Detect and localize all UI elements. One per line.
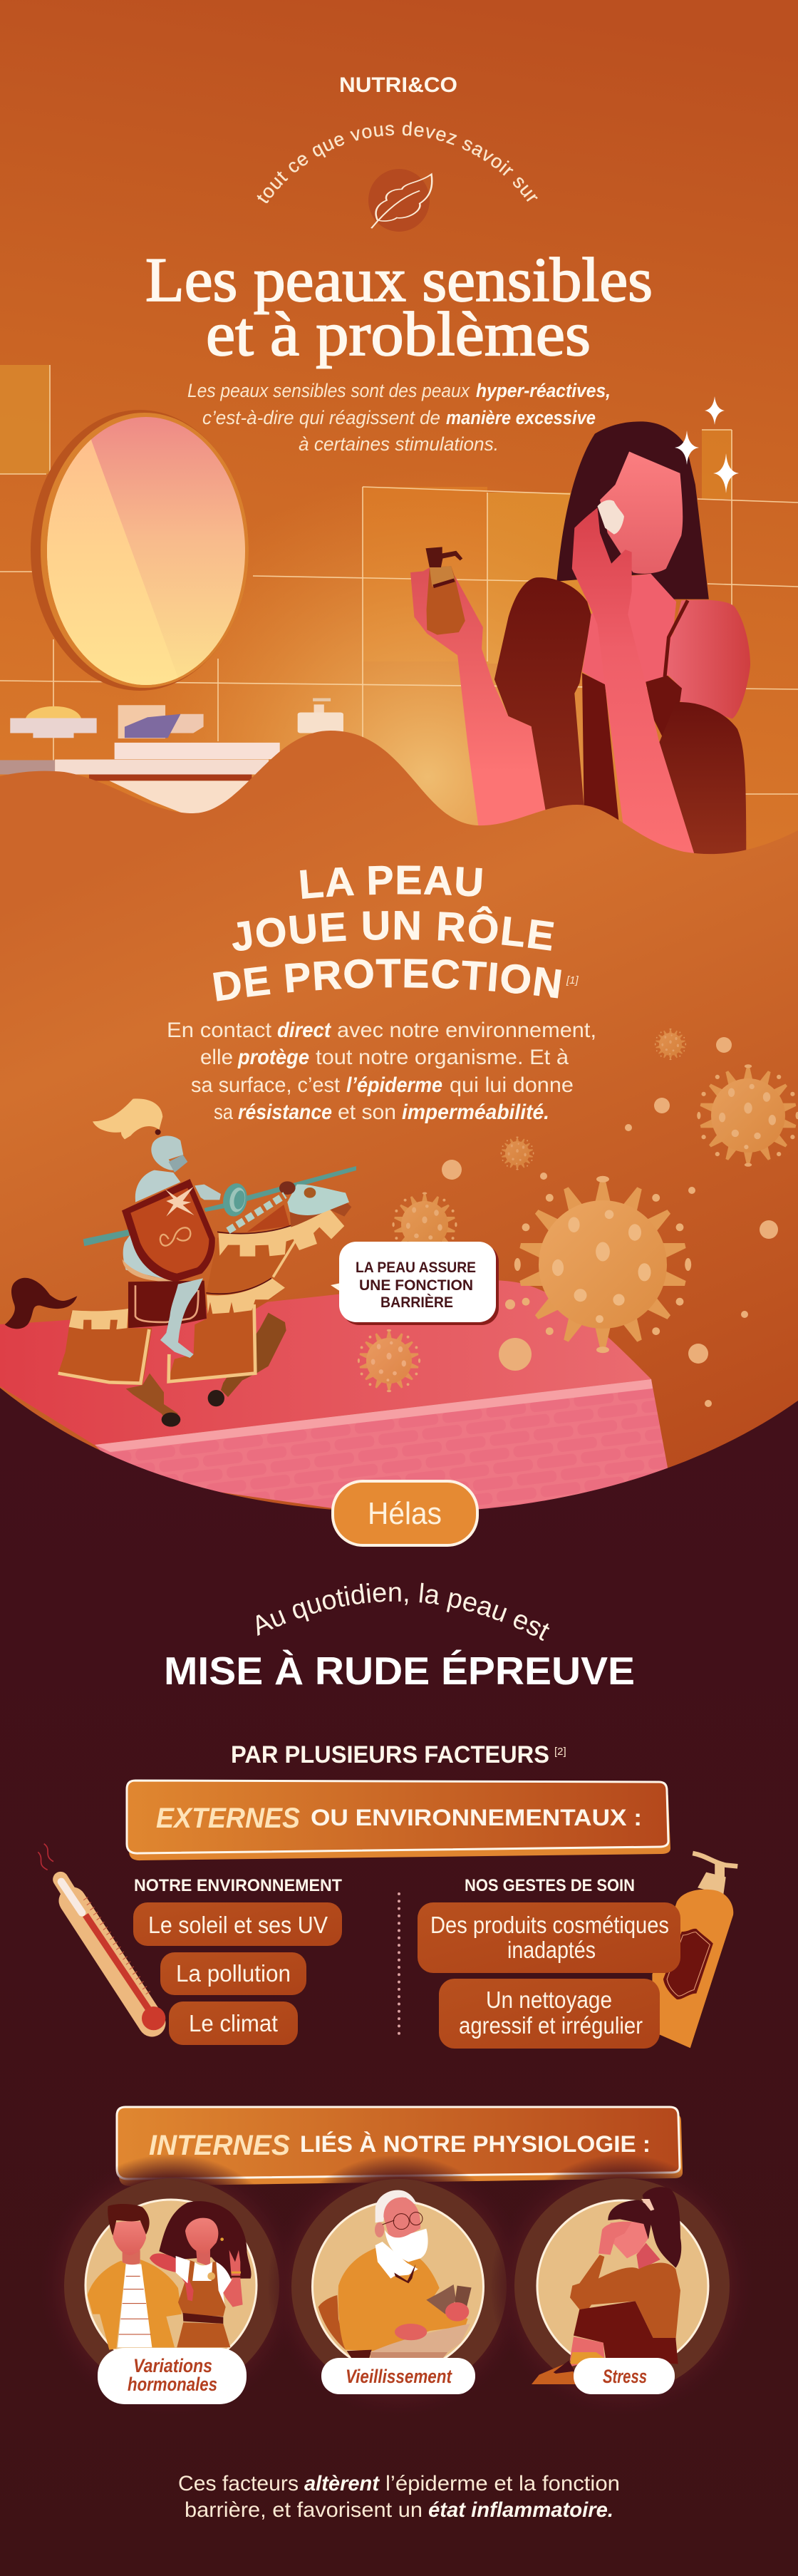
horse head armour xyxy=(290,1197,351,1227)
torso xyxy=(582,574,676,686)
curved tagline: tout ce que vous devez savoir sur xyxy=(256,121,538,203)
curved subheading: Au quotidien, la peau est xyxy=(256,1582,550,1641)
column: notre environnement: NOTRE ENVIRONNEMENT xyxy=(134,1876,342,1895)
pill: pollution: La pollution xyxy=(176,1960,291,1987)
hair xyxy=(556,421,709,599)
paragraph: protection: tout notre organisme. Et à xyxy=(316,1046,569,1069)
paragraph: protection xyxy=(167,1019,596,1124)
paragraph: protection: En contact xyxy=(167,1019,272,1042)
pill: soleil: Le soleil et ses UV xyxy=(148,1912,328,1938)
background: top orange section xyxy=(0,0,798,927)
paragraph: protection: résistance xyxy=(238,1101,332,1124)
saddle cloth xyxy=(128,1281,207,1328)
heading: la peau joue un rôle de protection: JOUE UN RÔLE xyxy=(232,906,554,951)
pill: climat xyxy=(169,2001,298,2045)
conclusion text: altèrent xyxy=(304,2472,380,2495)
pill: climat: Le climat xyxy=(189,2010,278,2036)
gauntlet xyxy=(195,1185,221,1200)
pill: nettoyage: Un nettoyage xyxy=(486,1987,612,2013)
speech bubble: fonction barrière xyxy=(331,1242,499,1325)
horse blanket upper xyxy=(207,1231,294,1293)
rear blanket xyxy=(58,1309,152,1385)
label xyxy=(574,2358,675,2394)
conclusion text: l’épiderme et la fonction xyxy=(385,2472,620,2495)
vamplate xyxy=(221,1181,249,1218)
plume xyxy=(93,1098,162,1139)
skin mound xyxy=(0,1280,670,1522)
panel: facteurs externes: OU ENVIRONNEMENTAUX : xyxy=(311,1805,642,1830)
dress xyxy=(646,676,682,739)
label xyxy=(98,2348,247,2404)
background: dark lower section xyxy=(0,1388,798,2576)
title: et à problèmes xyxy=(206,300,591,369)
panel: facteurs externes: EXTERNES xyxy=(156,1803,300,1834)
pill: produits cosmétiques: Des produits cosmétiques xyxy=(430,1912,669,1938)
icon: cream pump bottle xyxy=(652,1853,737,2048)
panel: facteurs internes xyxy=(117,2107,683,2186)
intro text xyxy=(187,380,611,455)
horse neck xyxy=(247,1205,290,1232)
bathroom wall tiles xyxy=(0,365,798,864)
heading: la peau joue un rôle de protection: LA PEAU xyxy=(300,865,482,899)
conclusion text: barrière, et favorisent un xyxy=(185,2498,423,2522)
woman xyxy=(159,2201,252,2279)
cream on cheek xyxy=(597,500,624,535)
label: Stress xyxy=(603,2366,647,2387)
footnote marker 1: [1] xyxy=(566,974,579,986)
pill: nettoyage xyxy=(439,1979,660,2049)
wave hills and second section background xyxy=(0,731,798,1568)
conclusion text: Ces facteurs xyxy=(178,2472,299,2495)
intro text: manière excessive xyxy=(446,407,596,428)
conclusion text xyxy=(178,2472,620,2522)
panel: facteurs internes: INTERNES xyxy=(149,2130,290,2161)
icon: leaf badge xyxy=(368,169,432,232)
man xyxy=(88,2261,126,2350)
right sleeve xyxy=(668,600,750,718)
illustration: sink and toiletries xyxy=(0,698,343,818)
horse legs xyxy=(126,1374,178,1421)
intro text: hyper-réactives, xyxy=(476,380,611,401)
intro text: c’est-à-dire qui réagissent de xyxy=(202,407,440,428)
face xyxy=(600,452,683,574)
product bottle xyxy=(425,547,465,635)
badge: hélas: Hélas xyxy=(368,1496,442,1531)
pill: produits cosmétiques xyxy=(418,1902,680,1973)
illustration: vieillissement xyxy=(267,2155,531,2418)
illustration: variations hormonales xyxy=(39,2154,303,2418)
arm holding bottle xyxy=(410,566,554,861)
label: Variations xyxy=(133,2355,212,2376)
badge: hélas xyxy=(333,1481,477,1545)
brand logo: NUTRI&CO xyxy=(339,73,457,97)
paragraph: protection: sa surface, c’est xyxy=(191,1073,341,1097)
column: nos gestes de soin xyxy=(418,1876,680,2049)
pill: soleil xyxy=(133,1902,342,1946)
paragraph: protection: sa xyxy=(214,1101,233,1124)
heading: la peau joue un rôle de protection xyxy=(213,865,561,1001)
speech bubble: fonction barrière: LA PEAU ASSURE xyxy=(356,1259,476,1276)
title: Les peaux sensibles xyxy=(145,246,653,315)
pill: pollution xyxy=(160,1952,306,1995)
paragraph: protection: direct xyxy=(277,1019,332,1042)
intro text: à certaines stimulations. xyxy=(299,433,499,455)
icon: bathroom mirror xyxy=(28,399,249,699)
heading: par plusieurs facteurs: PAR PLUSIEURS FACTEURS xyxy=(231,1741,549,1768)
left shoulder xyxy=(494,577,591,861)
paragraph: protection: protège xyxy=(237,1046,309,1069)
rein xyxy=(228,1195,285,1231)
viruses and floating particles xyxy=(358,1029,798,1407)
paragraph: protection: et son xyxy=(338,1101,396,1124)
title xyxy=(145,246,653,369)
panel: facteurs externes xyxy=(127,1781,670,1860)
paragraph: protection: elle xyxy=(200,1046,233,1069)
speech bubble: fonction barrière: BARRIÈRE xyxy=(380,1294,453,1311)
paragraph: protection: avec notre environnement, xyxy=(337,1019,596,1042)
lance xyxy=(83,1166,356,1246)
tail xyxy=(5,1278,77,1329)
heading: la peau joue un rôle de protection: DE PROTECTION xyxy=(213,959,561,1001)
heading: mise à rude épreuve: MISE À RUDE ÉPREUVE xyxy=(164,1649,635,1693)
paragraph: protection: l’épiderme xyxy=(346,1073,442,1097)
column: nos gestes de soin: NOS GESTES DE SOIN xyxy=(465,1876,635,1895)
label: hormonales xyxy=(128,2374,217,2395)
heading: par plusieurs facteurs: [2] xyxy=(554,1746,566,1758)
label: Vieillissement xyxy=(346,2366,452,2387)
intro text: Les peaux sensibles sont des peaux xyxy=(187,380,470,401)
armour torso xyxy=(135,1170,180,1202)
label xyxy=(321,2358,475,2394)
front blanket xyxy=(167,1278,285,1383)
knight leg xyxy=(160,1278,203,1358)
speech bubble: fonction barrière: UNE FONCTION xyxy=(359,1277,473,1294)
illustration: woman applying cream xyxy=(410,421,750,861)
panel: facteurs internes: LIÉS À NOTRE PHYSIOLOGIE : xyxy=(300,2131,651,2157)
illustration: stress xyxy=(490,2154,754,2418)
pill: produits cosmétiques: inadaptés xyxy=(507,1937,596,1963)
arm to face xyxy=(572,508,697,861)
dress strap xyxy=(665,600,688,676)
pill: nettoyage: agressif et irrégulier xyxy=(459,2012,643,2039)
column: notre environnement xyxy=(133,1876,342,2045)
illustration: knight on horseback xyxy=(5,1098,356,1427)
paragraph: protection: qui lui donne xyxy=(450,1073,574,1097)
icon: sparkles xyxy=(675,396,739,493)
icon: thermometer xyxy=(38,1844,165,2030)
paragraph: protection: imperméabilité. xyxy=(402,1101,549,1124)
helmet xyxy=(151,1135,183,1170)
shield xyxy=(122,1179,215,1282)
conclusion text: état inflammatoire. xyxy=(428,2498,613,2522)
